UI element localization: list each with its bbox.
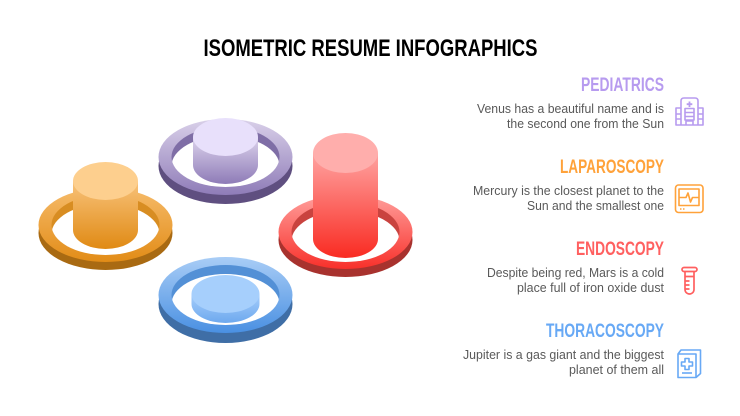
title: ISOMETRIC RESUME INFOGRAPHICS <box>204 35 538 62</box>
item: pediatrics <box>477 75 703 131</box>
ring and disc: blue <box>158 257 292 343</box>
text: pediatrics description: Venus has a beautiful name and is <box>477 101 664 116</box>
heading: endoscopy: ENDOSCOPY <box>576 239 664 260</box>
text: pediatrics description <box>477 101 664 131</box>
isometric diagram <box>38 118 412 343</box>
icon: monitor <box>676 185 703 212</box>
heading: pediatrics: PEDIATRICS <box>581 75 664 96</box>
icon: test tube <box>682 268 697 294</box>
text: laparoscopy description: Mercury is the closest planet to the <box>473 183 664 198</box>
item: thoracoscopy <box>463 321 700 378</box>
icon: medical book <box>678 350 700 378</box>
text: thoracoscopy description <box>463 347 664 377</box>
text: pediatrics description: the second one from the Sun <box>507 116 664 131</box>
heading: laparoscopy: LAPAROSCOPY <box>560 157 664 178</box>
heading: thoracoscopy: THORACOSCOPY <box>546 321 664 342</box>
ring and cylinder: red <box>278 133 412 277</box>
text: laparoscopy description: Sun and the smallest one <box>527 198 664 213</box>
text: thoracoscopy description: planet of them all <box>569 362 664 377</box>
item: laparoscopy <box>473 157 703 213</box>
text: laparoscopy description <box>473 183 664 213</box>
item: endoscopy <box>487 239 697 295</box>
text: endoscopy description <box>487 265 664 295</box>
ring and cylinder: purple <box>158 118 292 204</box>
ring and cylinder: orange <box>38 162 172 270</box>
icon: hospital <box>676 98 703 125</box>
text: thoracoscopy description: Jupiter is a gas giant and the biggest <box>463 347 664 362</box>
text: endoscopy description: Despite being red, Mars is a cold <box>487 265 664 280</box>
text: endoscopy description: place full of iron oxide dust <box>517 280 664 295</box>
